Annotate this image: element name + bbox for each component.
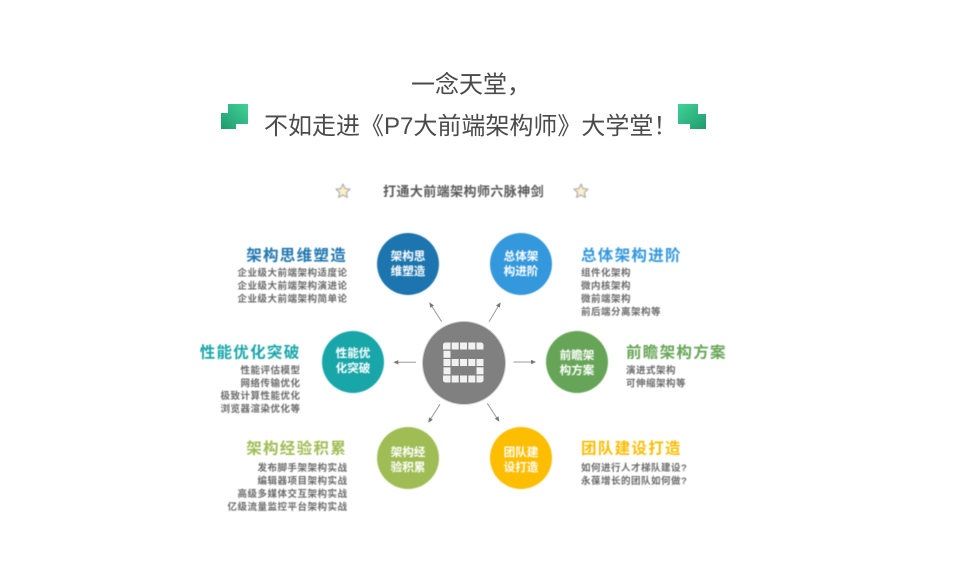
node: 性能优化突破: 性能优 (336, 346, 371, 360)
panel: 总体架构进阶 text: 前后端分离架构等 (581, 306, 661, 318)
title: 一念天堂， (411, 72, 531, 98)
panel: 性能优化突破 text: 网络传输优化 (240, 378, 300, 390)
arrow: bottom right (487, 403, 499, 422)
node: 前瞻架构方案: 构方案 (560, 363, 595, 377)
panel: 架构经验积累 text: 发布脚手架架构实战 (257, 462, 348, 474)
subtitle: 打通大前端架构师六脉神剑 (383, 184, 544, 199)
title (264, 72, 677, 140)
title: 不如走进《P7大前端架构师》大学堂！ (264, 113, 677, 140)
arrows from hub to nodes (393, 302, 536, 423)
panel: 架构思维塑造 text: 架构思维塑造 (246, 246, 347, 264)
node: 架构经验积累: 架构经 (391, 445, 426, 459)
panel: 前瞻架构方案 text: 前瞻架构方案 (626, 342, 727, 362)
node: 前瞻架构方案 (546, 331, 608, 393)
node: 架构经验积累 (377, 427, 439, 489)
panel: 性能优化突破 text: 浏览器渲染优化等 (220, 403, 300, 415)
panel: 架构思维塑造 text (237, 246, 348, 305)
panel: 总体架构进阶 text: 组件化架构 (581, 267, 631, 279)
panel: 前瞻架构方案 text: 演进式架构 (626, 364, 676, 376)
node: 性能优化突破 (322, 331, 384, 393)
arrow: left (393, 360, 416, 364)
icon: right star (574, 184, 588, 197)
arrow: top left (429, 302, 442, 322)
arrow: right (513, 360, 536, 364)
panel: 前瞻架构方案 text: 可伸缩架构等 (626, 378, 686, 390)
node: 团队建设打造: 团队建 (504, 445, 539, 459)
node: 团队建设打造 (490, 427, 552, 489)
panel: 团队建设打造 text: 如何进行人才梯队建设? (581, 462, 687, 474)
panel: 架构经验积累 text (227, 438, 348, 513)
node: 团队建设打造: 设打造 (504, 460, 539, 474)
center hub with number 6 (422, 322, 506, 404)
node: 架构思维塑造: 架构思 (391, 249, 426, 263)
panel: 架构经验积累 text: 高级多媒体交互架构实战 (237, 488, 348, 500)
node: 架构经验积累: 验积累 (391, 460, 425, 474)
node: 架构思维塑造: 维塑造 (391, 264, 426, 278)
panel: 架构经验积累 text: 亿级流量监控平台架构实战 (227, 501, 348, 513)
node: 架构思维塑造 (377, 233, 439, 295)
node: 总体架构进阶 (490, 233, 552, 295)
panel: 架构思维塑造 text: 企业级大前端架构适度论 (237, 267, 348, 279)
node: 总体架构进阶: 总体架 (504, 249, 539, 263)
icon: left star (336, 184, 350, 197)
panel: 总体架构进阶 text: 总体架构进阶 (581, 246, 682, 264)
panel: 性能优化突破 text: 极致计算性能优化 (220, 390, 300, 402)
node: 前瞻架构方案: 前瞻架 (560, 348, 595, 362)
icon: six made of squares (443, 342, 484, 382)
panel: 总体架构进阶 text: 微内核架构 (581, 280, 631, 292)
arrow: bottom left (428, 404, 440, 423)
panel: 架构经验积累 text: 架构经验积累 (246, 438, 347, 458)
panel: 团队建设打造 text: 团队建设打造 (581, 438, 682, 458)
node: 总体架构进阶: 构进阶 (504, 264, 539, 278)
panel: 架构思维塑造 text: 企业级大前端架构演进论 (237, 280, 348, 292)
panel: 架构思维塑造 text: 企业级大前端架构简单论 (237, 293, 348, 305)
panel: 团队建设打造 text: 永葆增长的团队如何做? (581, 475, 687, 487)
panel: 团队建设打造 text (581, 438, 687, 487)
panel: 性能优化突破 text (200, 342, 300, 415)
subtitle heading with stars (336, 184, 588, 199)
panel: 架构经验积累 text: 编辑器项目架构实战 (257, 475, 348, 487)
panel: 前瞻架构方案 text (626, 342, 727, 390)
arrow: top right (489, 302, 501, 322)
panel: 性能优化突破 text: 性能评估模型 (240, 364, 300, 376)
icon: right green squares (678, 104, 706, 129)
icon: left green squares (221, 104, 248, 129)
panel: 总体架构进阶 text: 微前端架构 (581, 293, 631, 305)
node: 性能优化突破: 化突破 (336, 361, 371, 375)
panel: 总体架构进阶 text (581, 246, 682, 318)
panel: 性能优化突破 text: 性能优化突破 (200, 342, 300, 362)
